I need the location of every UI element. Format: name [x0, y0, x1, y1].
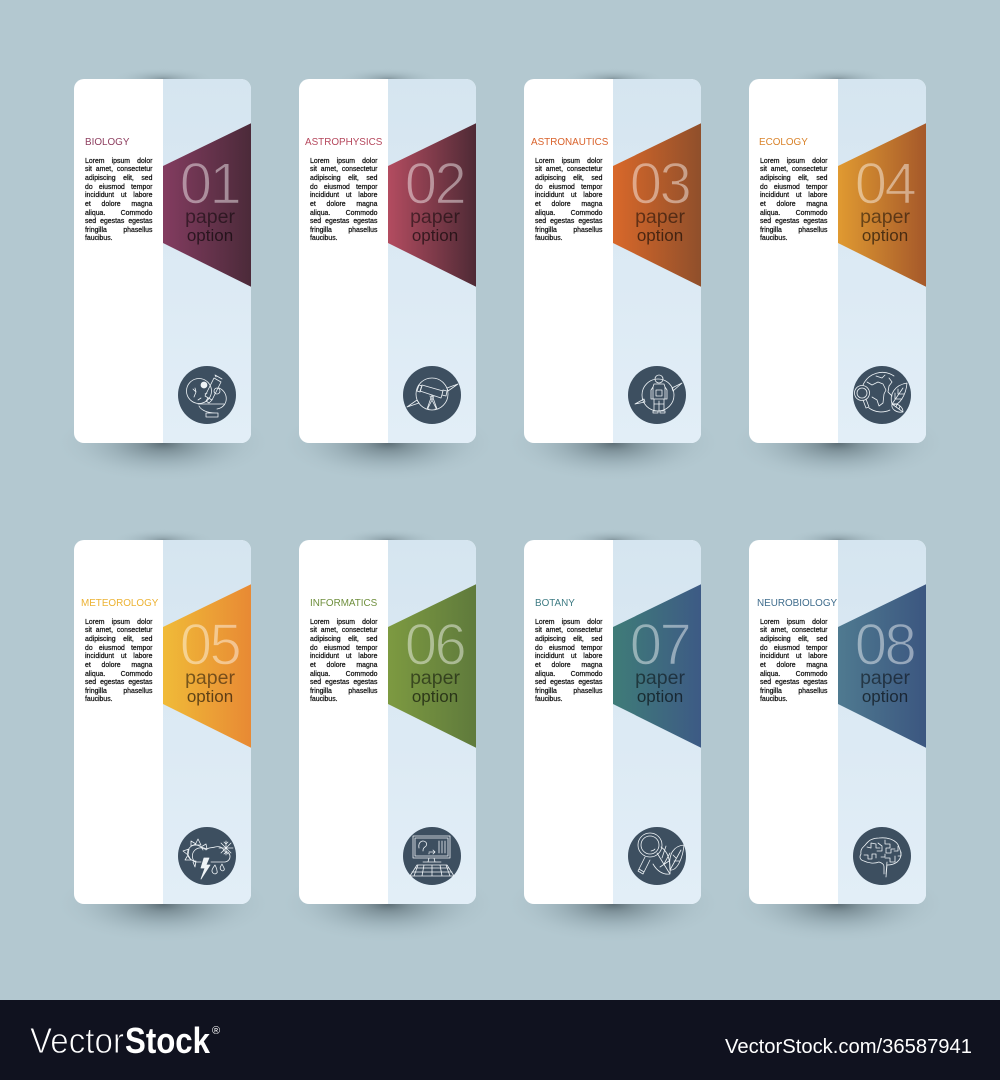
- panel: card 03 astronautics: [524, 79, 701, 443]
- text block: informatics: [310, 617, 378, 703]
- text block: astronautics: et dolore magna: [535, 199, 602, 208]
- wedge with number 04: option: [861, 226, 908, 245]
- text block: biology: Lorem ipsum dolor: [85, 156, 152, 165]
- wedge with number 04: 04: [854, 152, 915, 216]
- heading: biology: BIOLOGY: [85, 137, 129, 148]
- text block: astrophysics: et dolore magna: [310, 199, 377, 208]
- text block: meteorology: Lorem ipsum dolor: [85, 617, 152, 626]
- text block: neurobiology: aliqua. Commodo: [760, 669, 827, 678]
- wedge with number 02: 02: [404, 152, 464, 216]
- text block: biology: sed egestas egestas: [85, 216, 152, 225]
- text block: informatics: aliqua. Commodo: [310, 669, 377, 678]
- text block: astrophysics: sit amet, consectetur: [310, 164, 377, 173]
- text block: informatics: sed egestas egestas: [310, 677, 377, 686]
- text block: biology: [84, 156, 153, 242]
- text block: neurobiology: incididunt ut labore: [760, 651, 827, 660]
- wedge with number 06: [388, 584, 476, 748]
- text block: meteorology: incididunt ut labore: [85, 651, 152, 660]
- wedge with number 07: paper: [635, 667, 685, 689]
- text block: neurobiology: [760, 617, 828, 703]
- wedge with number 06: 06: [404, 612, 464, 678]
- text block: neurobiology: Lorem ipsum dolor: [760, 617, 827, 626]
- text block: meteorology: fringilla phasellus: [85, 686, 152, 695]
- wedge with number 05: 05: [179, 612, 239, 678]
- text block: botany: do eiusmod tempor: [535, 643, 602, 652]
- text block: informatics: et dolore magna: [310, 660, 377, 669]
- text block: ecology: faucibus.: [760, 233, 788, 242]
- text block: astronautics: fringilla phasellus: [535, 225, 602, 234]
- text block: botany: sit amet, consectetur: [535, 625, 602, 634]
- icon: weather: [178, 827, 236, 885]
- text block: botany: Lorem ipsum dolor: [535, 617, 602, 626]
- text block: meteorology: faucibus.: [85, 694, 113, 703]
- text block: neurobiology: fringilla phasellus: [760, 686, 827, 695]
- wedge with number 05: [163, 584, 251, 748]
- icon: brain: [853, 827, 911, 885]
- text block: botany: aliqua. Commodo: [535, 669, 602, 678]
- wedge with number 02: paper: [410, 206, 460, 228]
- heading: astrophysics: ASTROPHYSICS: [305, 137, 382, 148]
- text block: ecology: sed egestas egestas: [760, 216, 827, 225]
- heading: informatics: INFORMATICS: [310, 598, 377, 609]
- text block: astronautics: aliqua. Commodo: [535, 208, 602, 217]
- wedge with number 06: paper: [410, 667, 460, 689]
- text block: meteorology: aliqua. Commodo: [85, 669, 152, 678]
- text block: meteorology: [84, 617, 153, 703]
- text block: informatics: incididunt ut labore: [310, 651, 377, 660]
- text block: ecology: aliqua. Commodo: [760, 208, 827, 217]
- wedge with number 02: option: [411, 226, 458, 245]
- registered mark: ®: [212, 1025, 220, 1037]
- text block: astrophysics: [310, 156, 378, 242]
- panel: card 01 biology: [74, 79, 251, 443]
- text block: botany: et dolore magna: [535, 660, 602, 669]
- text block: botany: sed egestas egestas: [535, 677, 602, 686]
- text block: botany: [534, 617, 603, 703]
- icon: astronaut: [628, 366, 686, 424]
- text block: astrophysics: adipiscing elit, sed: [310, 173, 377, 182]
- text block: meteorology: et dolore magna: [85, 660, 152, 669]
- text block: botany: incididunt ut labore: [535, 651, 602, 660]
- wedge with number 07: 07: [629, 612, 689, 678]
- text block: informatics: sit amet, consectetur: [310, 625, 377, 634]
- text block: astrophysics: Lorem ipsum dolor: [310, 156, 377, 165]
- panel: card 08 neurobiology: [749, 540, 926, 904]
- text block: astrophysics: do eiusmod tempor: [310, 182, 377, 191]
- wedge with number 08: option: [861, 687, 908, 706]
- text block: neurobiology: sed egestas egestas: [760, 677, 827, 686]
- heading: meteorology: METEOROLOGY: [81, 598, 158, 609]
- text block: neurobiology: sit amet, consectetur: [760, 625, 827, 634]
- wedge with number 02: [388, 123, 476, 287]
- text block: biology: faucibus.: [85, 233, 113, 242]
- text block: astronautics: adipiscing elit, sed: [535, 173, 602, 182]
- wedge with number 03: 03: [629, 152, 689, 216]
- text block: astrophysics: faucibus.: [310, 233, 338, 242]
- text block: meteorology: do eiusmod tempor: [85, 643, 152, 652]
- text block: ecology: do eiusmod tempor: [760, 182, 827, 191]
- text block: informatics: adipiscing elit, sed: [310, 634, 377, 643]
- wedge with number 01: 01: [179, 152, 239, 216]
- text block: astronautics: sed egestas egestas: [535, 216, 602, 225]
- text block: meteorology: sit amet, consectetur: [85, 625, 152, 634]
- text block: biology: sit amet, consectetur: [85, 164, 152, 173]
- heading: ecology: ECOLOGY: [759, 137, 808, 148]
- wedge with number 03: paper: [635, 206, 685, 228]
- panel: card 05 meteorology: [74, 540, 251, 904]
- text block: astrophysics: aliqua. Commodo: [310, 208, 377, 217]
- text block: biology: incididunt ut labore: [85, 190, 152, 199]
- wedge with number 01: option: [186, 226, 233, 245]
- text block: biology: aliqua. Commodo: [85, 208, 152, 217]
- panel: card 04 ecology: [749, 79, 926, 443]
- text block: neurobiology: faucibus.: [760, 694, 788, 703]
- heading: astronautics: ASTRONAUTICS: [531, 137, 608, 148]
- text block: neurobiology: adipiscing elit, sed: [760, 634, 827, 643]
- text block: ecology: sit amet, consectetur: [760, 164, 827, 173]
- text block: astronautics: incididunt ut labore: [535, 190, 602, 199]
- text block: astronautics: do eiusmod tempor: [535, 182, 602, 191]
- text block: informatics: Lorem ipsum dolor: [310, 617, 377, 626]
- wedge with number 05: option: [186, 687, 233, 706]
- text block: informatics: faucibus.: [310, 694, 338, 703]
- wedge with number 01: paper: [185, 206, 235, 228]
- icon: microscope: [178, 366, 236, 424]
- text block: astrophysics: fringilla phasellus: [310, 225, 377, 234]
- wedge with number 05: paper: [185, 667, 235, 689]
- text block: meteorology: sed egestas egestas: [85, 677, 152, 686]
- heading: botany: BOTANY: [535, 598, 575, 609]
- wedge with number 06: option: [411, 687, 458, 706]
- footer bar: [0, 1000, 1000, 1080]
- wedge with number 08: 08: [854, 612, 914, 678]
- text block: astronautics: Lorem ipsum dolor: [535, 156, 602, 165]
- text block: ecology: adipiscing elit, sed: [760, 173, 827, 182]
- text block: biology: fringilla phasellus: [85, 225, 152, 234]
- wedge with number 03: [613, 123, 701, 287]
- text block: botany: faucibus.: [535, 694, 563, 703]
- logo wordmark: Stock: Stock: [125, 1020, 211, 1061]
- heading: neurobiology: NEUROBIOLOGY: [757, 598, 837, 609]
- wedge with number 04: paper: [860, 206, 910, 228]
- image id: VectorStock.com/36587941: [725, 1036, 972, 1058]
- icon: computer: [403, 827, 461, 885]
- wedge with number 01: [163, 123, 251, 287]
- text block: botany: fringilla phasellus: [535, 686, 602, 695]
- text block: ecology: [760, 156, 828, 242]
- text block: ecology: et dolore magna: [760, 199, 827, 208]
- wedge with number 03: option: [636, 226, 683, 245]
- text block: ecology: incididunt ut labore: [760, 190, 827, 199]
- text block: astronautics: faucibus.: [535, 233, 563, 242]
- panel: card 02 astrophysics: [299, 79, 476, 443]
- text block: neurobiology: et dolore magna: [760, 660, 827, 669]
- text block: meteorology: adipiscing elit, sed: [85, 634, 152, 643]
- panel: card 07 botany: [524, 540, 701, 904]
- wedge with number 07: option: [636, 687, 683, 706]
- text block: informatics: fringilla phasellus: [310, 686, 377, 695]
- wedge with number 08: paper: [860, 667, 910, 689]
- text block: biology: do eiusmod tempor: [85, 182, 152, 191]
- panel: card 06 informatics: [299, 540, 476, 904]
- text block: astrophysics: sed egestas egestas: [310, 216, 377, 225]
- icon: magnifier and leaf: [628, 827, 686, 885]
- icon: globe and leaf: [853, 366, 911, 424]
- text block: biology: adipiscing elit, sed: [85, 173, 152, 182]
- logo wordmark: Vector: Vector: [30, 1020, 124, 1061]
- text block: astronautics: sit amet, consectetur: [535, 164, 602, 173]
- wedge with number 07: [613, 584, 701, 748]
- text block: astronautics: [534, 156, 603, 242]
- wedge with number 08: [838, 584, 926, 748]
- text block: ecology: fringilla phasellus: [760, 225, 827, 234]
- wedge with number 04: [838, 123, 926, 287]
- icon: telescope: [403, 366, 461, 424]
- text block: botany: adipiscing elit, sed: [535, 634, 602, 643]
- text block: informatics: do eiusmod tempor: [310, 643, 377, 652]
- text block: biology: et dolore magna: [85, 199, 152, 208]
- text block: ecology: Lorem ipsum dolor: [760, 156, 827, 165]
- text block: astrophysics: incididunt ut labore: [310, 190, 377, 199]
- text block: neurobiology: do eiusmod tempor: [760, 643, 827, 652]
